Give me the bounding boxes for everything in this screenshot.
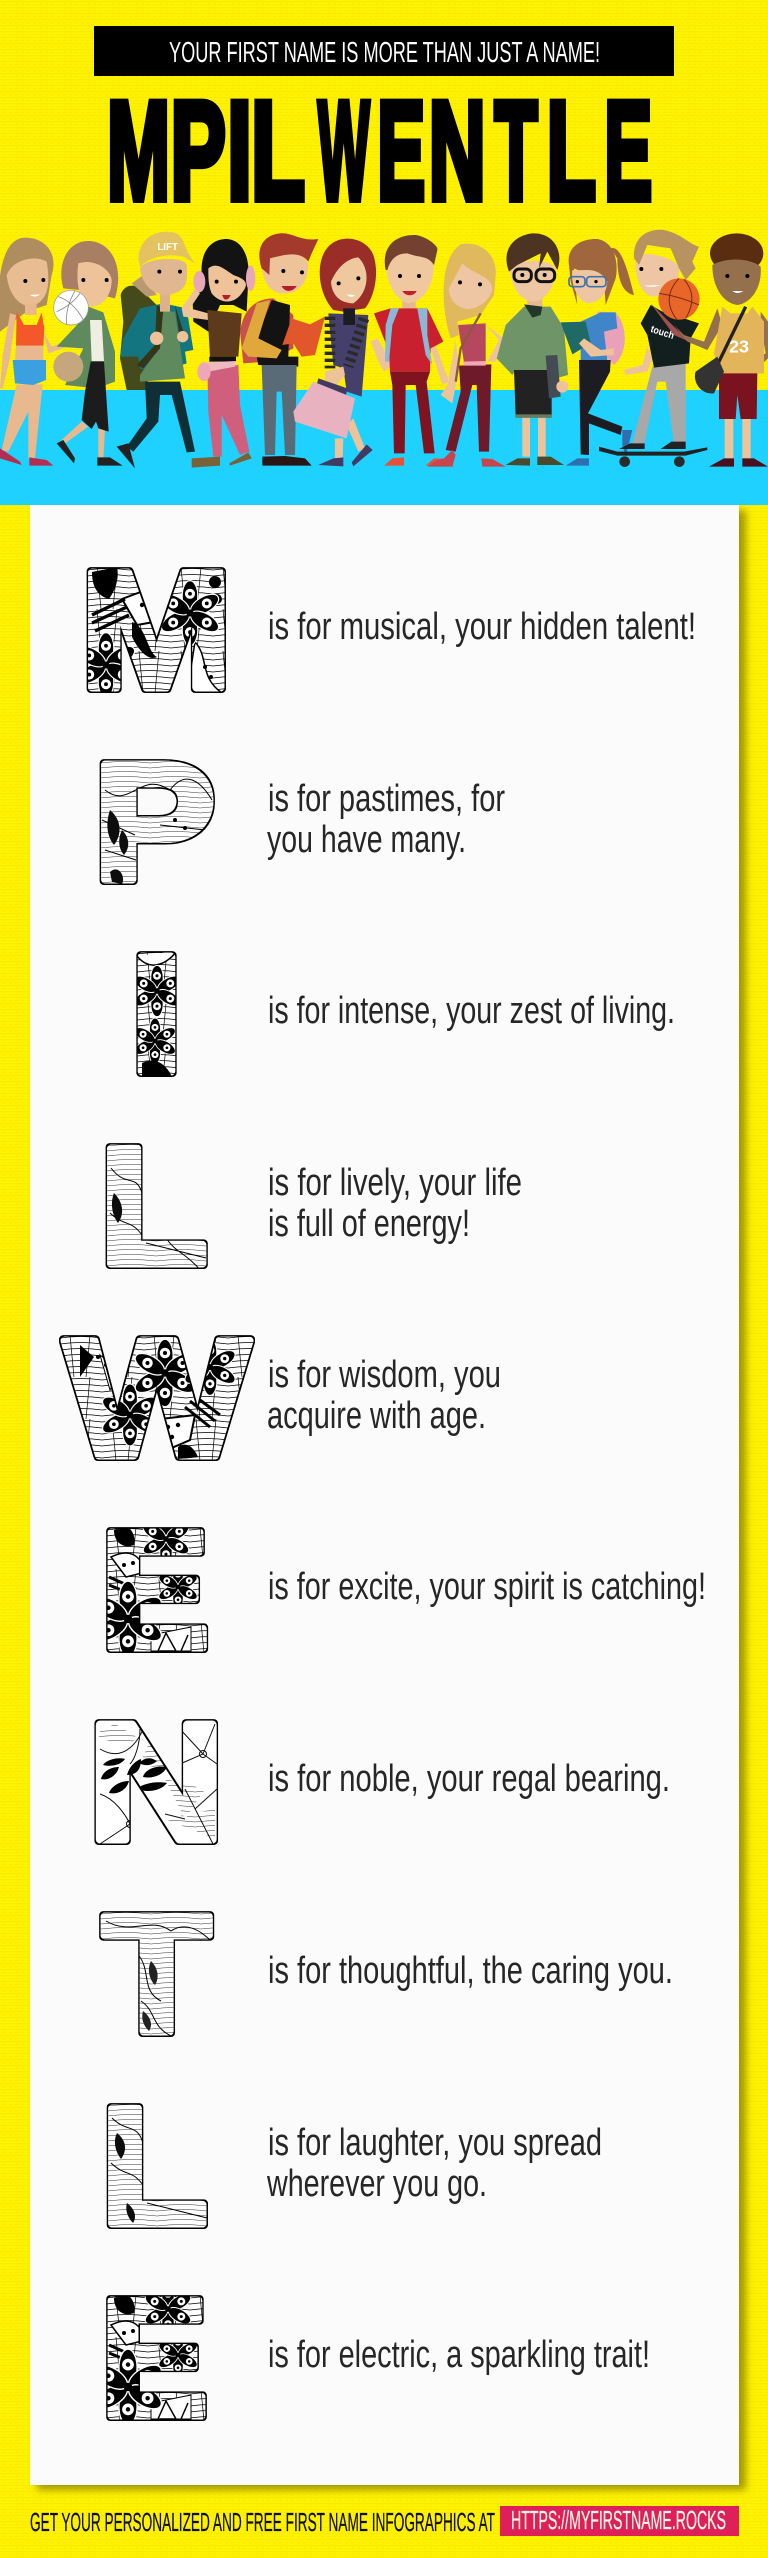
letter E: E bbox=[101, 2266, 208, 2452]
illustration: group of people, right half bbox=[371, 230, 768, 467]
row: T is for thoughtful bbox=[103, 1882, 673, 2068]
row: E is for excite bbox=[101, 1498, 706, 1684]
icon: eyeglasses bbox=[514, 269, 555, 282]
person: hiker with cap and backpack bbox=[117, 232, 195, 468]
person: boy with red hair and book bbox=[240, 233, 325, 466]
text: L lines: is for lively, your life bbox=[268, 1162, 522, 1204]
letter I: I bbox=[130, 922, 184, 1108]
person: girl with headphones bbox=[182, 239, 255, 468]
name title: L bbox=[547, 72, 596, 229]
person: red-haired girl with pink bag bbox=[293, 239, 376, 466]
tagline bar bbox=[94, 26, 674, 76]
name title: N bbox=[429, 72, 486, 229]
name title: P bbox=[170, 72, 226, 229]
person: skateboarder with basketball bbox=[599, 230, 707, 467]
name title: L bbox=[251, 72, 305, 229]
person: boy in red shirt bbox=[371, 235, 454, 467]
header banner bbox=[94, 26, 674, 229]
person: curly-haired boy in yellow tank bbox=[674, 233, 768, 467]
person: hiker with cap and backpack: LIFT bbox=[157, 242, 178, 253]
text: W lines: is for wisdom, you bbox=[268, 1354, 501, 1396]
row: E is for electric bbox=[101, 2266, 650, 2452]
blue floor band bbox=[0, 390, 768, 505]
letter N: N bbox=[88, 1690, 225, 1876]
icon: open book bbox=[282, 317, 325, 357]
person: boy with glasses bbox=[497, 233, 568, 466]
text: W lines: acquire with age. bbox=[267, 1395, 486, 1437]
white content panel bbox=[30, 505, 739, 2485]
text: W lines bbox=[267, 1354, 501, 1437]
name title: E bbox=[377, 72, 425, 229]
letter W: W bbox=[65, 1306, 249, 1492]
text: L lines bbox=[268, 1162, 522, 1245]
name title: E bbox=[604, 72, 652, 229]
row: P is for pastimes bbox=[93, 730, 505, 916]
person: girl in orange top bbox=[0, 238, 82, 466]
letter L: L bbox=[100, 1114, 208, 1300]
letter E: E bbox=[101, 1498, 209, 1684]
letter T: T bbox=[103, 1882, 210, 2068]
icon: basketball bbox=[658, 278, 700, 320]
letter P: P bbox=[93, 730, 215, 916]
illustration: group of people, left half bbox=[0, 232, 376, 468]
text: P lines bbox=[267, 778, 505, 861]
row: W is for wisdom bbox=[65, 1306, 501, 1492]
name title: T bbox=[494, 72, 538, 229]
text: E line: is for electric, a sparkling trait! bbox=[268, 2334, 650, 2376]
text: P lines: is for pastimes, for bbox=[268, 778, 505, 820]
text: L lines: is full of energy! bbox=[268, 1203, 470, 1245]
icon: volleyball bbox=[54, 290, 88, 325]
person: girl with ponytail and tablet bbox=[561, 239, 634, 466]
name title: M bbox=[107, 72, 170, 229]
row: L is for laughter bbox=[101, 2074, 602, 2260]
footer bbox=[30, 2505, 739, 2537]
text: L lines bbox=[266, 2122, 602, 2205]
text: L lines: is for laughter, you spread bbox=[268, 2122, 602, 2164]
icon: skateboard bbox=[599, 447, 707, 467]
person: skateboarder with basketball: touch bbox=[649, 324, 675, 342]
row: I is for intense bbox=[130, 922, 675, 1108]
letter M: M bbox=[80, 538, 232, 724]
icon: pink handbag bbox=[293, 378, 355, 438]
text: L lines: wherever you go. bbox=[266, 2163, 487, 2205]
row: M is for musical bbox=[80, 538, 696, 724]
person: curly-haired boy in yellow tank: 23 bbox=[729, 336, 749, 356]
person: blonde girl bbox=[427, 244, 506, 467]
text: P lines: you have many. bbox=[267, 819, 466, 861]
row: L is for lively bbox=[100, 1114, 522, 1300]
person: girl with volleyball bbox=[53, 241, 123, 466]
name title: W bbox=[318, 72, 370, 229]
row: N is for noble bbox=[88, 1690, 670, 1876]
name title: I bbox=[227, 72, 252, 229]
letter L: L bbox=[101, 2074, 208, 2260]
